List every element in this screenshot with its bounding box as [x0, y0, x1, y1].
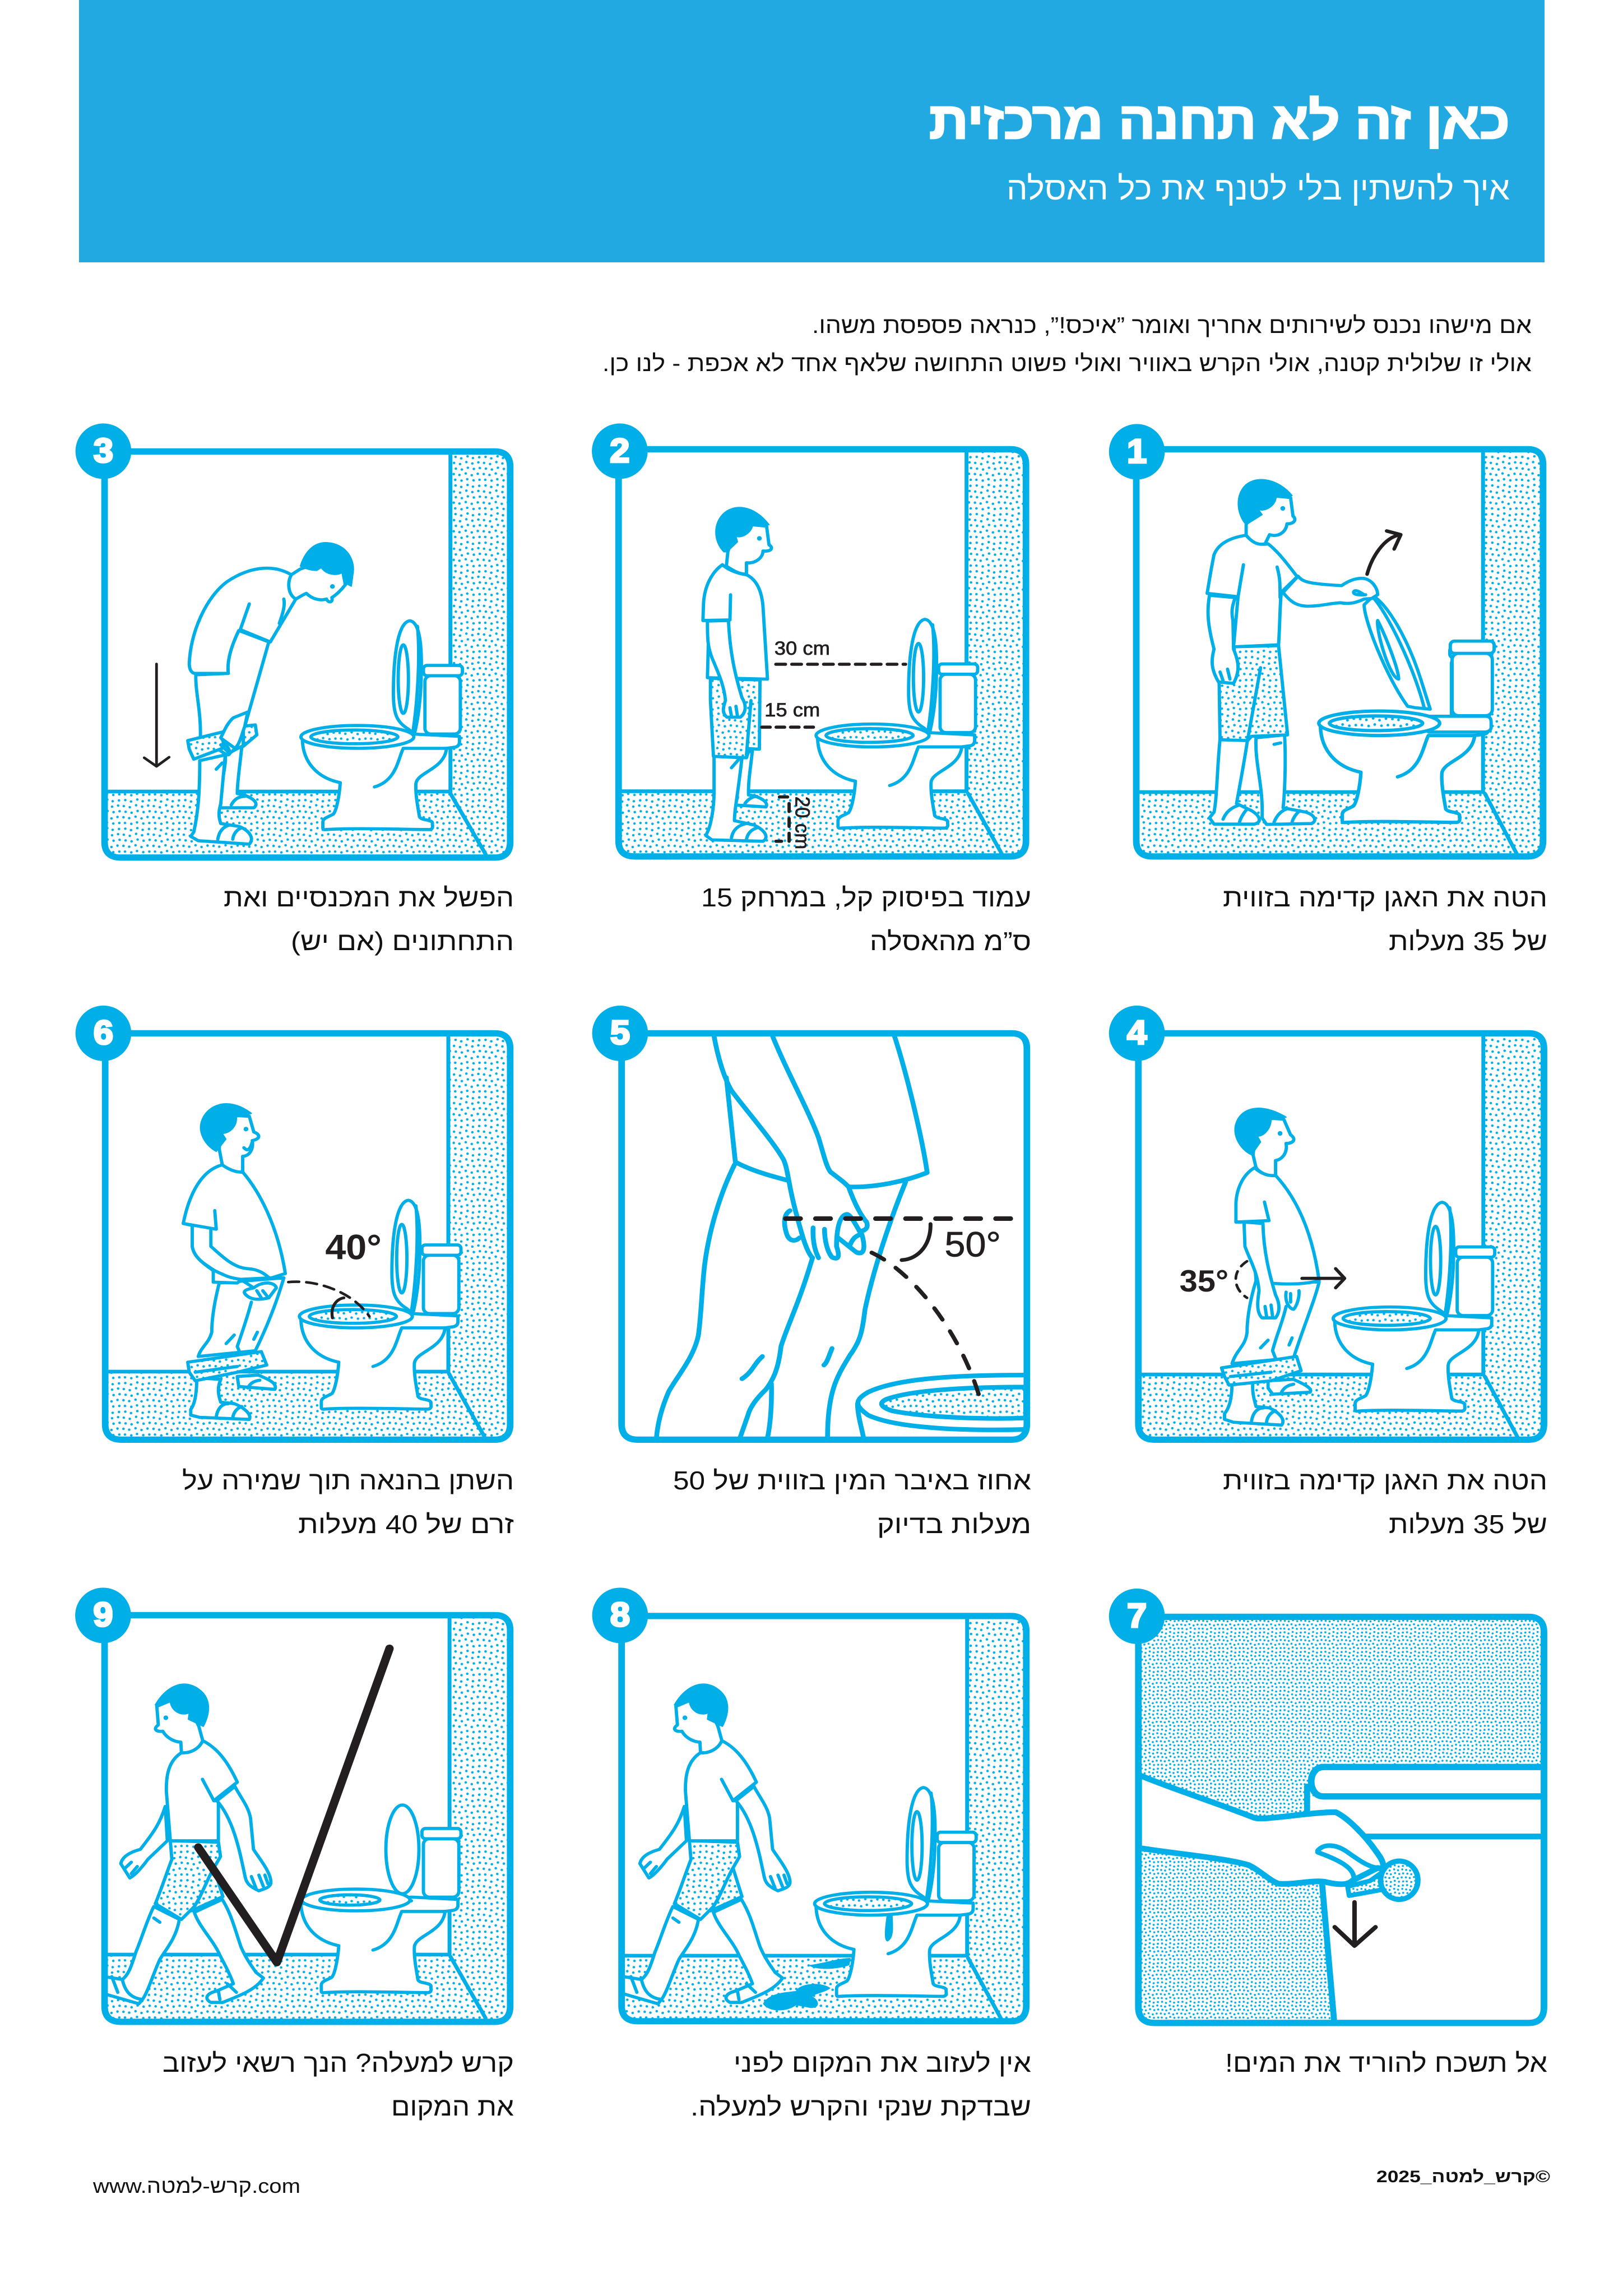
caption 3: [224, 883, 514, 956]
panel 8: do not leave a mess: [592, 1587, 1026, 2021]
panel 6: pee at 40 degrees: [76, 1006, 510, 1439]
caption 3: התחתונים (אם יש): [291, 927, 514, 956]
caption 9: קרש למעלה? הנך רשאי לעזוב: [163, 2048, 514, 2077]
badge 8: [592, 1587, 648, 1643]
caption 7: אל תשכח להוריד את המים!: [1225, 2048, 1547, 2077]
caption 6: [182, 1466, 514, 1539]
arrow: down: [144, 664, 169, 766]
bowl: [857, 1375, 1026, 1438]
toilet: [301, 621, 462, 830]
caption 2: עמוד בפיסוק קל, במרחק 15: [701, 883, 1031, 912]
caption 8: אין לעזוב את המקום לפני: [734, 2048, 1031, 2077]
close-up figure: [656, 1036, 927, 1438]
badge 5: [592, 1006, 648, 1061]
flush handle: [1348, 1861, 1418, 1899]
subtitle: איך להשתין בלי לטנף את כל האסלה: [1007, 170, 1510, 207]
measurement: 20 cm: 20 cm: [791, 797, 814, 849]
title: כאן זה לא תחנה מרכזית: [929, 92, 1510, 150]
arrow: down: [1335, 1902, 1375, 1946]
badge 4: 4: [1127, 1014, 1147, 1052]
badge 9: [75, 1587, 131, 1643]
badge 1: [1109, 424, 1165, 479]
badge 4: [1109, 1006, 1165, 1061]
toilet: [1333, 1202, 1495, 1411]
caption 3: הפשל את המכנסיים ואת: [224, 883, 514, 912]
measurement: 15 cm: 15 cm: [764, 699, 820, 721]
badge 6: 6: [94, 1014, 113, 1052]
dashed stream: [288, 1282, 369, 1316]
badge 2: 2: [610, 432, 629, 470]
panel 3: lower the pants: [76, 423, 510, 858]
angle label: 40 degrees: 40°: [325, 1227, 382, 1267]
badge 3: [76, 423, 131, 479]
caption 1: [1223, 883, 1547, 956]
black check mark: [198, 1649, 389, 1962]
caption 9: [163, 2048, 514, 2121]
badge 8: 8: [610, 1596, 630, 1634]
arrow: forward: [1302, 1269, 1344, 1288]
header banner: [79, 0, 1545, 262]
badge 7: [1109, 1589, 1165, 1644]
panel 1: raise the lid: [1109, 424, 1543, 857]
badge 6: [76, 1006, 131, 1061]
toilet: [1319, 596, 1494, 822]
angle label: 40 degrees: [325, 1227, 382, 1318]
caption 8: שבדקת שנקי והקרש למעלה.: [690, 2092, 1031, 2121]
arm and hand: [1139, 1775, 1383, 1884]
man standing: [703, 507, 772, 841]
caption 2: ס”מ מהאסלה: [870, 927, 1031, 956]
cistern: [1307, 1767, 1544, 2023]
toilet with drip: [815, 1788, 976, 1997]
arrow: lift: [1367, 531, 1401, 574]
man lifting the lid: [1207, 480, 1378, 825]
badge 7: 7: [1127, 1597, 1147, 1635]
caption 4: של 35 מעלות: [1389, 1510, 1547, 1539]
caption 5: [673, 1466, 1031, 1539]
man tilting pelvis: [1222, 1108, 1319, 1425]
caption 9: את המקום: [391, 2092, 514, 2121]
panel 5: close-up grip at 50 degrees: [592, 1006, 1027, 1439]
caption 5: מעלות בדיוק: [877, 1510, 1031, 1539]
intro paragraph: אם מישהו נכנס לשירותים אחריך ואומר ”איכס!”, כנראה פספסת משהו.: [812, 312, 1532, 338]
angle arc and 50 degrees label: 50°: [945, 1224, 1001, 1264]
caption 6: זרם של 40 מעלות: [298, 1510, 514, 1539]
footer: copyright: ©קרש_למטה_2025: [1376, 2168, 1550, 2186]
panel 7: flush: [1109, 1589, 1544, 2023]
man bending: [188, 543, 354, 844]
badge 9: 9: [93, 1596, 113, 1634]
dashed stream: [871, 1253, 981, 1401]
angle label: 35 degrees: 35°: [1180, 1263, 1228, 1298]
caption 2: [701, 883, 1031, 956]
caption 4: [1223, 1466, 1547, 1539]
intro paragraph: [602, 312, 1532, 376]
panel 9: seat up, check mark: [75, 1587, 510, 2022]
man walking away: [104, 1684, 271, 2004]
intro paragraph: אולי זו שלולית קטנה, אולי הקרש באוויר ואולי פשוט התחושה שלאף אחד לא אכפת - לנו כן.: [602, 350, 1532, 376]
caption 4: הטה את האגן קדימה בזווית: [1223, 1466, 1547, 1495]
measurement: 30 cm: 30 cm: [775, 637, 830, 659]
man walking away: [623, 1684, 790, 2004]
badge 1: 1: [1127, 433, 1147, 470]
measurement: 20 cm: [776, 797, 814, 849]
toilet with lid: [301, 1805, 461, 1993]
toilet: [816, 619, 977, 828]
puddles on the floor: [763, 1958, 851, 2011]
caption 1: של 35 מעלות: [1389, 927, 1547, 956]
angle arc and 50 degrees label: [902, 1224, 1001, 1264]
footer: website: www.קרש-למטה.com: [92, 2174, 300, 2197]
caption 1: הטה את האגן קדימה בזווית: [1223, 883, 1547, 912]
badge 5: 5: [610, 1014, 630, 1052]
dashed horizontal reference: [786, 1214, 1012, 1223]
caption 5: אחוז באיבר המין בזווית של 50: [673, 1466, 1031, 1495]
angle label: 35 degrees: [1180, 1261, 1247, 1298]
caption 6: השתן בהנאה תוך שמירה על: [182, 1466, 514, 1495]
caption 8: [690, 2048, 1031, 2121]
badge 2: [592, 423, 648, 479]
man peeing: [183, 1104, 285, 1419]
toilet: [299, 1200, 461, 1409]
badge 3: 3: [94, 432, 113, 470]
panel 2: stand at distance: [592, 423, 1026, 857]
panel 4: tilt pelvis: [1109, 1006, 1544, 1439]
